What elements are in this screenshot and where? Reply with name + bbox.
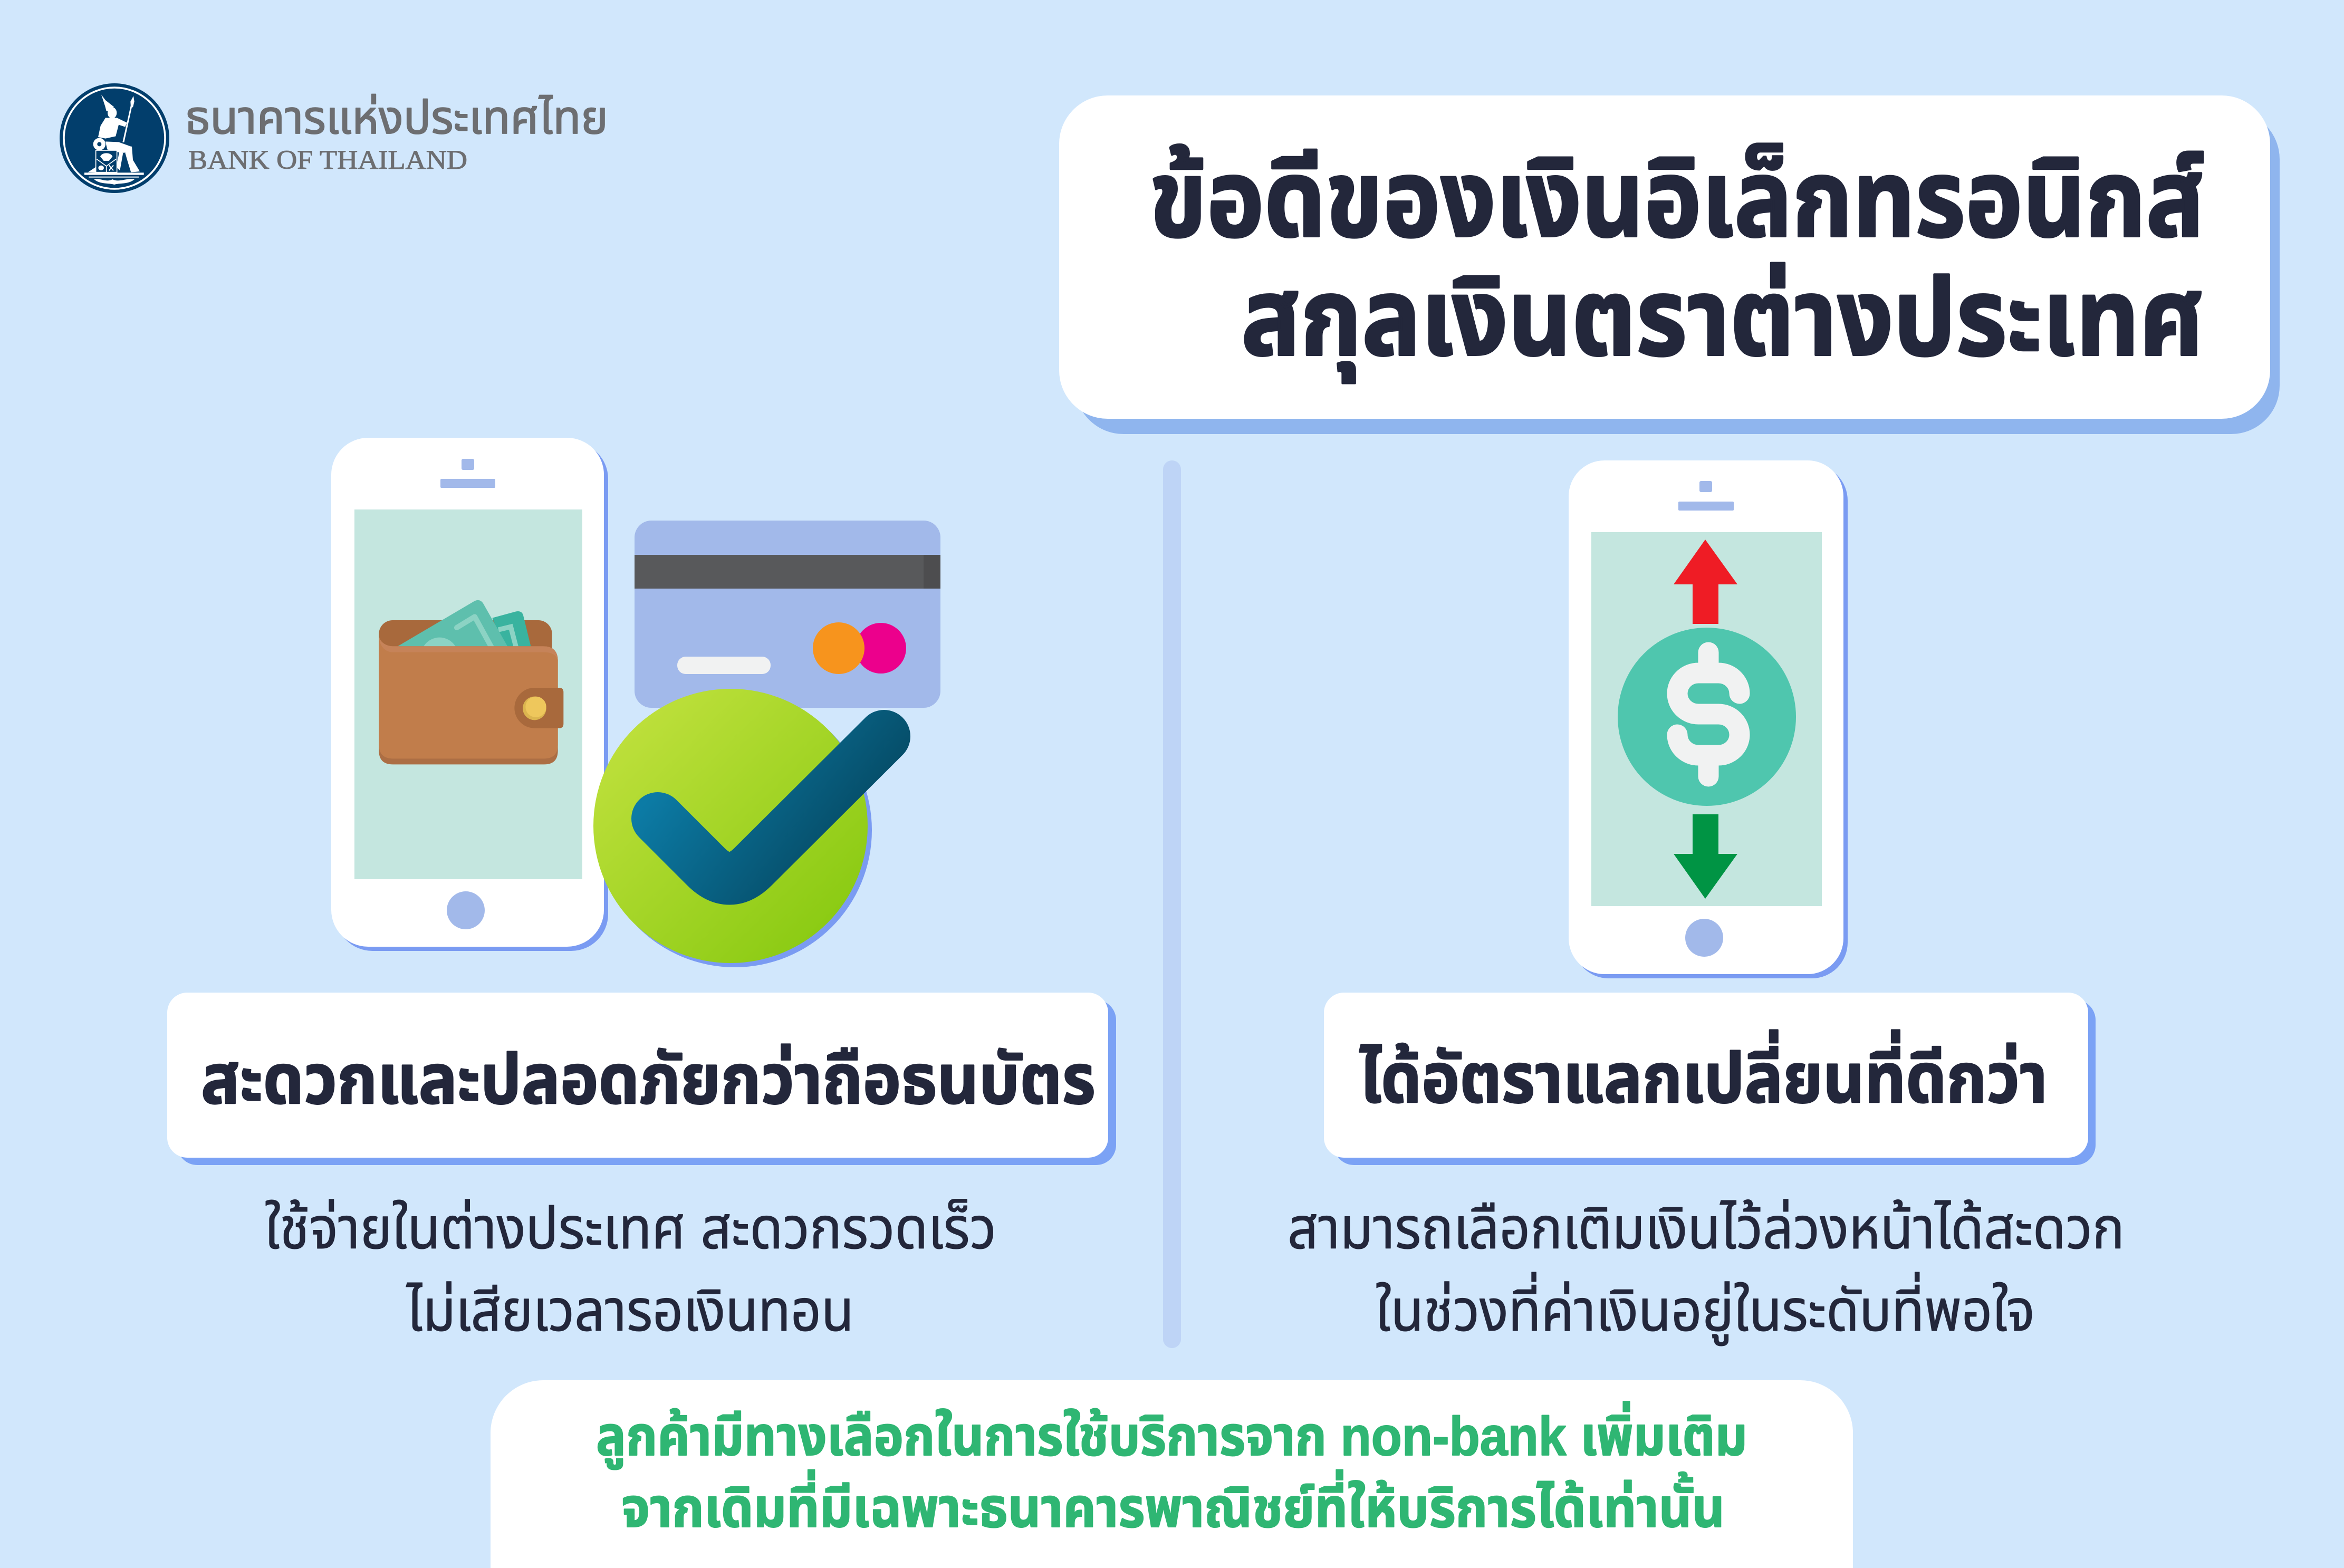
logo: Bank of Thailand (60, 83, 608, 193)
text: left description: ใช้จ่ายในต่างประเทศ สะดวกรวดเร็ว (265, 1196, 996, 1261)
title line 1: ข้อดีของเงินอิเล็กทรอนิกส์ (1149, 139, 2204, 259)
text: right description: สามารถเลือกเติมเงินไว้ล่วงหน้าได้สะดวก (1288, 1196, 2125, 1261)
panel: right heading (1324, 993, 2096, 1165)
logo Thai name: ธนาคารแห่งประเทศไทย (185, 91, 608, 143)
title card (1059, 95, 2280, 434)
arrow down: green (1674, 814, 1737, 899)
text: left description: ไม่เสียเวลารอเงินทอน (406, 1278, 854, 1343)
illustration: phone with exchange rate arrows (1569, 460, 1848, 978)
panel: bottom note: จากเดิมที่มีเฉพาะธนาคารพาณิชย์ที่ให้บริการได้เท่านั้น (621, 1470, 1725, 1539)
icon: dollar coin (1618, 628, 1796, 806)
arrow up: red (1674, 540, 1737, 624)
icon: green check badge (593, 689, 884, 967)
logo English name: BANK OF THAILAND (188, 146, 467, 175)
text: left description (265, 1196, 996, 1343)
panel: bottom note: ลูกค้ามีทางเลือกในการใช้บริการจาก non-bank เพิ่มเติม (596, 1401, 1747, 1469)
panel: left heading (167, 993, 1116, 1165)
phone left (331, 438, 608, 951)
panel: bottom note (491, 1380, 1853, 1568)
panel: left heading: สะดวกและปลอดภัยกว่าถือธนบัตร (201, 1041, 1096, 1118)
icon: credit card (635, 521, 940, 708)
text: right description: ในช่วงที่ค่าเงินอยู่ในระดับที่พอใจ (1376, 1272, 2035, 1346)
icon: wallet with banknotes (379, 600, 563, 764)
logo emblem (60, 83, 169, 193)
text: right description (1288, 1196, 2125, 1346)
title line 2: สกุลเงินตราต่างประเทศ (1241, 257, 2204, 383)
phone right (1569, 460, 1848, 978)
panel: right heading: ได้อัตราแลกเปลี่ยนที่ดีกว่า (1359, 1030, 2048, 1117)
center divider (1163, 460, 1181, 1348)
illustration: phone with wallet, card and check (331, 438, 940, 967)
